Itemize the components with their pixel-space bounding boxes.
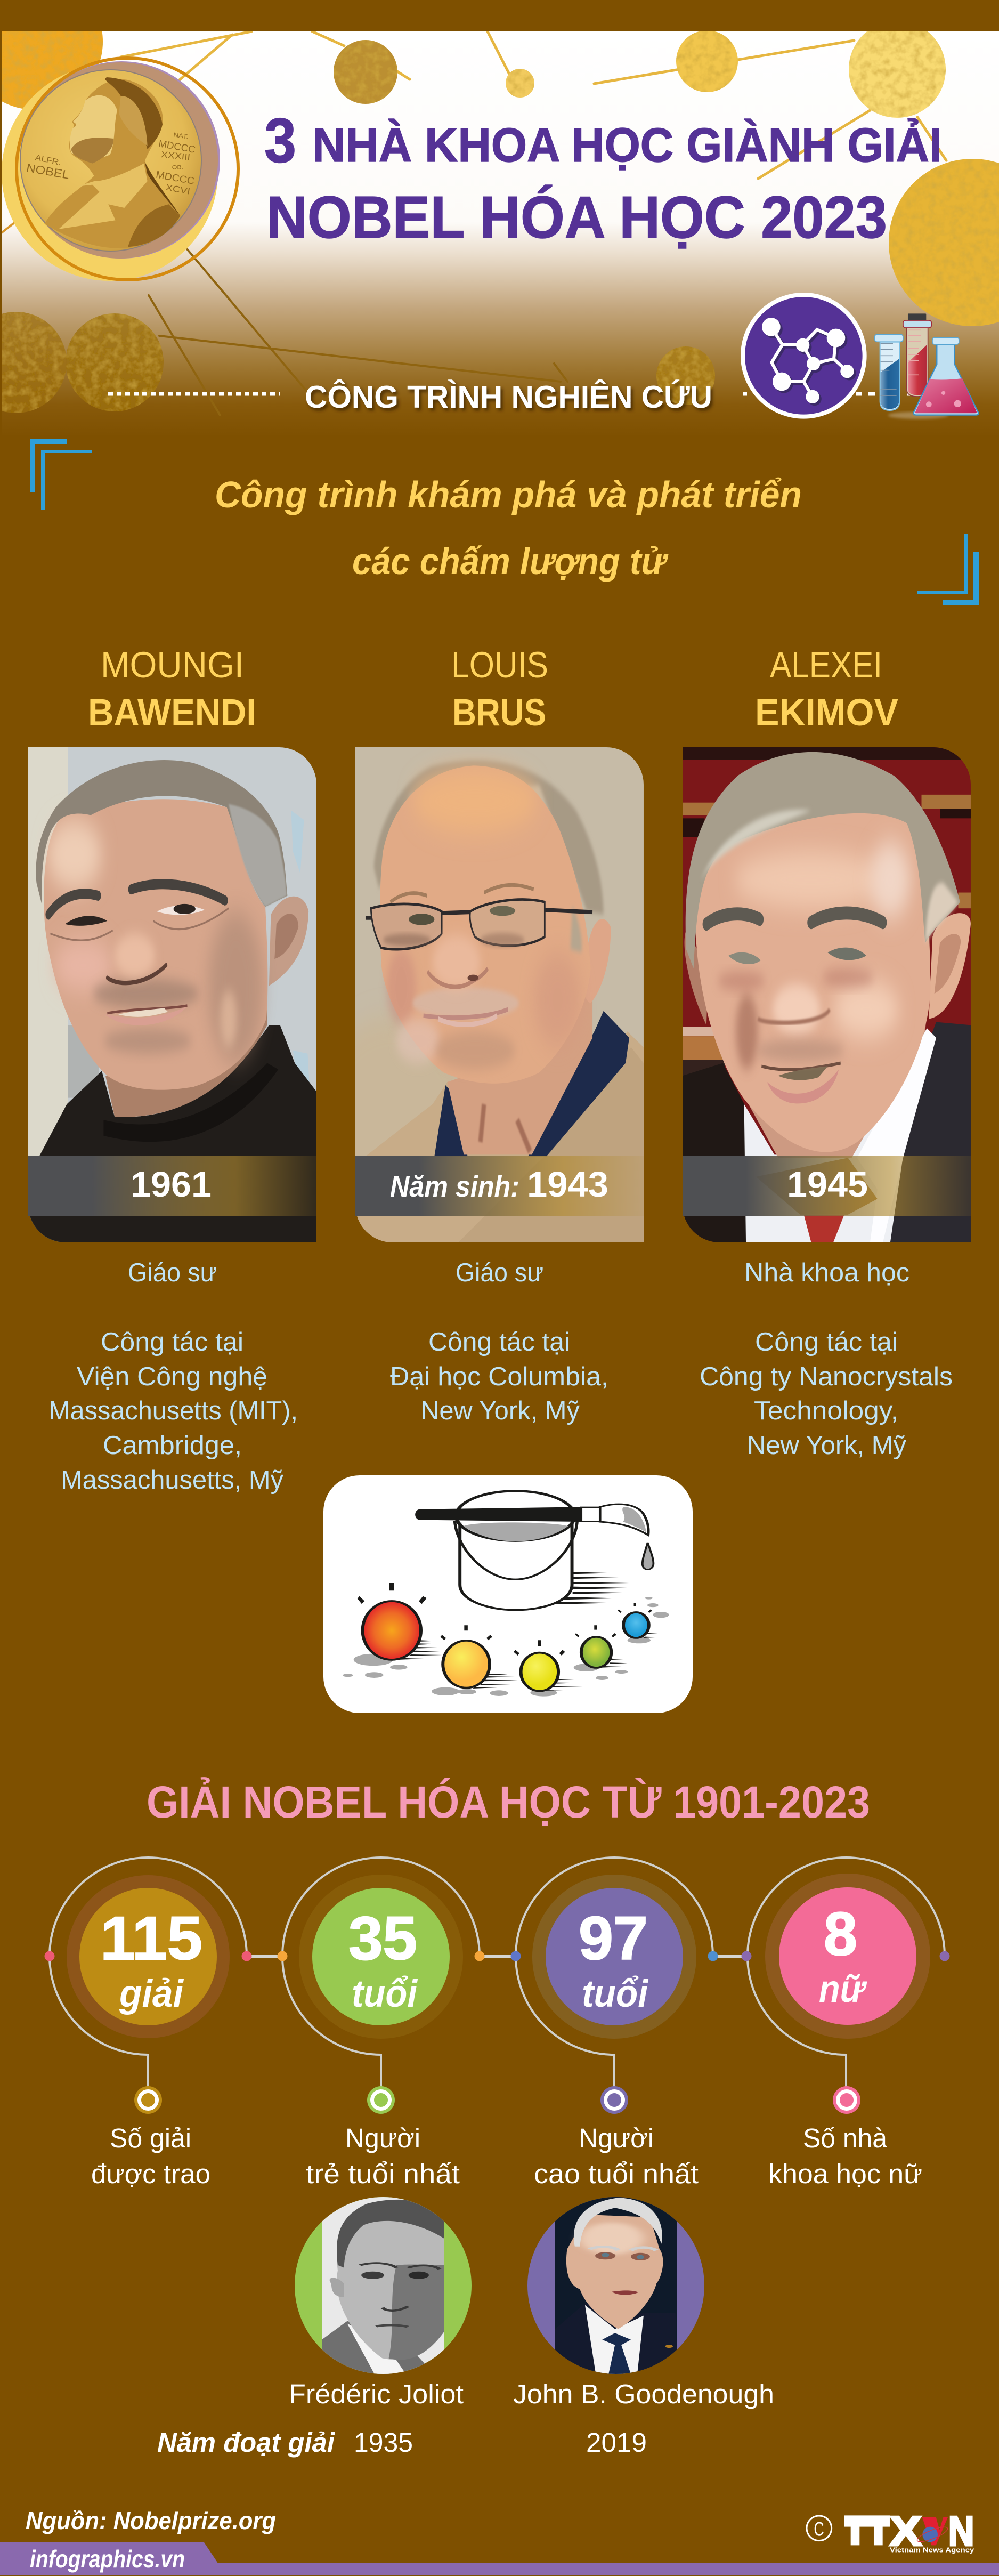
sparks [358, 1583, 652, 1656]
timeline connectors [250, 1955, 744, 1958]
section label: research work: CÔNG TRÌNH NGHIÊN CỨU [305, 379, 712, 415]
stat: 8 women: 8 [824, 1900, 857, 1968]
title: 3 [264, 106, 296, 176]
icon: Nobel medal: MDCCC [155, 169, 196, 187]
photo: Alexei Ekimov [683, 747, 971, 1242]
medal bust [44, 77, 180, 248]
icon: Nobel medal: ALFR. [34, 153, 62, 167]
scientist names: BAWENDI [88, 692, 256, 734]
quantum dots [363, 1601, 649, 1691]
speed lines [398, 1633, 659, 1691]
scientist names: EKIMOV [755, 692, 898, 734]
icon: Nobel medal: NOBEL [25, 161, 70, 182]
stat: 97 years oldest: Người [579, 2123, 654, 2153]
biography: Bawendi [48, 1258, 298, 1495]
scientist names: MOUNGI [101, 644, 244, 685]
logo: TTXVN: C [814, 2517, 824, 2540]
biography: Bawendi: Viện Công nghệ [77, 1362, 267, 1391]
photo: Louis Brus [355, 747, 644, 1242]
portrait: John B. Goodenough [527, 2196, 704, 2377]
birth year band: 1961 [28, 1156, 316, 1216]
biography: Brus: Đại học Columbia, [390, 1362, 608, 1391]
biography: Ekimov: Công tác tại [755, 1328, 898, 1356]
stat: 115 prizes [45, 1858, 251, 2189]
biography: Ekimov: Công ty Nanocrystals [700, 1362, 953, 1391]
stat: 97 years oldest: 97 [579, 1904, 648, 1973]
icon: Nobel medal: XXXIII [160, 149, 191, 163]
biography: Ekimov: New York, Mỹ [747, 1431, 906, 1460]
icon: Nobel medal: MDCCC [158, 138, 197, 155]
footer band: infographics.vn [30, 2545, 185, 2573]
portrait captions: 1935 [354, 2427, 413, 2458]
biography: Bawendi: Cambridge, [103, 1431, 242, 1460]
stat: 8 women: nữ [819, 1968, 867, 2010]
icon: Nobel medal: NAT. [173, 131, 189, 141]
biography: Bawendi: Công tác tại [101, 1328, 243, 1356]
icon: Nobel medal [2, 58, 238, 281]
header panel [2, 31, 999, 417]
stat: 115 prizes: Số giải [110, 2123, 191, 2153]
biography: Brus: New York, Mỹ [420, 1396, 580, 1425]
heading: Nobel chemistry 1901-2023: GIẢI NOBEL HÓA HỌC TỪ 1901-2023 [147, 1777, 870, 1827]
biography: Brus [390, 1258, 608, 1425]
subtitle [215, 474, 802, 582]
biography: Ekimov [700, 1258, 953, 1460]
biography: Brus: Giáo sư [456, 1258, 543, 1287]
red test tube [903, 313, 931, 397]
stat: 97 years oldest: cao tuổi nhất [534, 2159, 699, 2189]
stat: 115 prizes: được trao [91, 2159, 210, 2189]
stat: 35 years youngest: trẻ tuổi nhất [306, 2159, 460, 2189]
flask [914, 337, 979, 415]
subtitle: các chấm lượng tử [352, 540, 669, 582]
decorative corner bracket top left [30, 439, 92, 510]
footer band [0, 2542, 999, 2575]
stat: 115 prizes: giải [119, 1973, 184, 2015]
stat: 35 years youngest: Người [345, 2123, 420, 2153]
scientist names: ALEXEI [770, 644, 882, 685]
scientist names [88, 644, 898, 734]
biography: Bawendi: Massachusetts, Mỹ [61, 1466, 283, 1495]
biography: Bawendi: Massachusetts (MIT), [48, 1396, 298, 1425]
icon: Nobel medal: OB. [172, 164, 183, 171]
portrait captions: Frédéric Joliot [289, 2379, 464, 2409]
stat: 115 prizes: 115 [100, 1904, 202, 1973]
neck [749, 1023, 926, 1158]
icon: Nobel medal: XCVI [165, 182, 191, 197]
icon: molecule and lab glassware [741, 293, 979, 419]
source: Nguồn: Nobelprize.org [26, 2507, 276, 2534]
stat: 35 years youngest [277, 1858, 485, 2189]
scientist names: LOUIS [451, 644, 548, 685]
logo: TTXVN: X [890, 2508, 922, 2554]
stat: 35 years youngest: 35 [348, 1904, 417, 1973]
stat: 97 years oldest [510, 1858, 718, 2189]
biography: Bawendi: Giáo sư [128, 1258, 217, 1287]
portrait captions [157, 2379, 774, 2458]
stat: 8 women [742, 1858, 949, 2189]
stat: 8 women: khoa học nữ [768, 2159, 922, 2189]
portrait: Frédéric Joliot [295, 2196, 472, 2377]
biography: Ekimov: Technology, [754, 1396, 898, 1425]
photo: Moungi Bawendi [28, 747, 316, 1242]
portrait captions: 2019 [586, 2427, 647, 2458]
portrait captions: Năm đoạt giải [157, 2427, 336, 2458]
title: NHÀ KHOA HỌC GIÀNH GIẢI [312, 118, 942, 172]
logo: TTXVN [807, 2508, 974, 2554]
stat: 8 women: Số nhà [803, 2123, 888, 2153]
title: NOBEL HÓA HỌC 2023 [266, 184, 887, 251]
stat: 35 years youngest: tuổi [352, 1973, 418, 2015]
birth year band: 1961: 1961 [131, 1165, 212, 1205]
paint brush [415, 1504, 653, 1570]
stat: 97 years oldest: tuổi [582, 1973, 649, 2015]
portrait captions: John B. Goodenough [513, 2379, 774, 2409]
scientist names: BRUS [452, 692, 546, 734]
subtitle: Công trình khám phá và phát triển [215, 474, 802, 515]
blue test tube [875, 334, 903, 410]
decorative corner bracket bottom right [917, 534, 979, 605]
biography: Brus: Công tác tại [428, 1328, 570, 1356]
paint splashes [343, 1597, 669, 1697]
paint bucket [454, 1491, 633, 1610]
biography: Ekimov: Nhà khoa học [744, 1258, 909, 1287]
birth year band: 1945 [683, 1156, 971, 1216]
birth year band: 1943: Năm sinh: [390, 1169, 519, 1203]
title [264, 106, 942, 251]
birth year band: 1945: 1945 [787, 1165, 868, 1205]
illustration card: paint bucket and quantum dots [323, 1475, 693, 1713]
birth year band: 1943 [355, 1156, 644, 1216]
logo: TTXVN: N [948, 2508, 974, 2554]
birth year band: 1943: 1943 [527, 1165, 608, 1205]
logo: TTXVN: Vietnam News Agency [890, 2546, 974, 2554]
